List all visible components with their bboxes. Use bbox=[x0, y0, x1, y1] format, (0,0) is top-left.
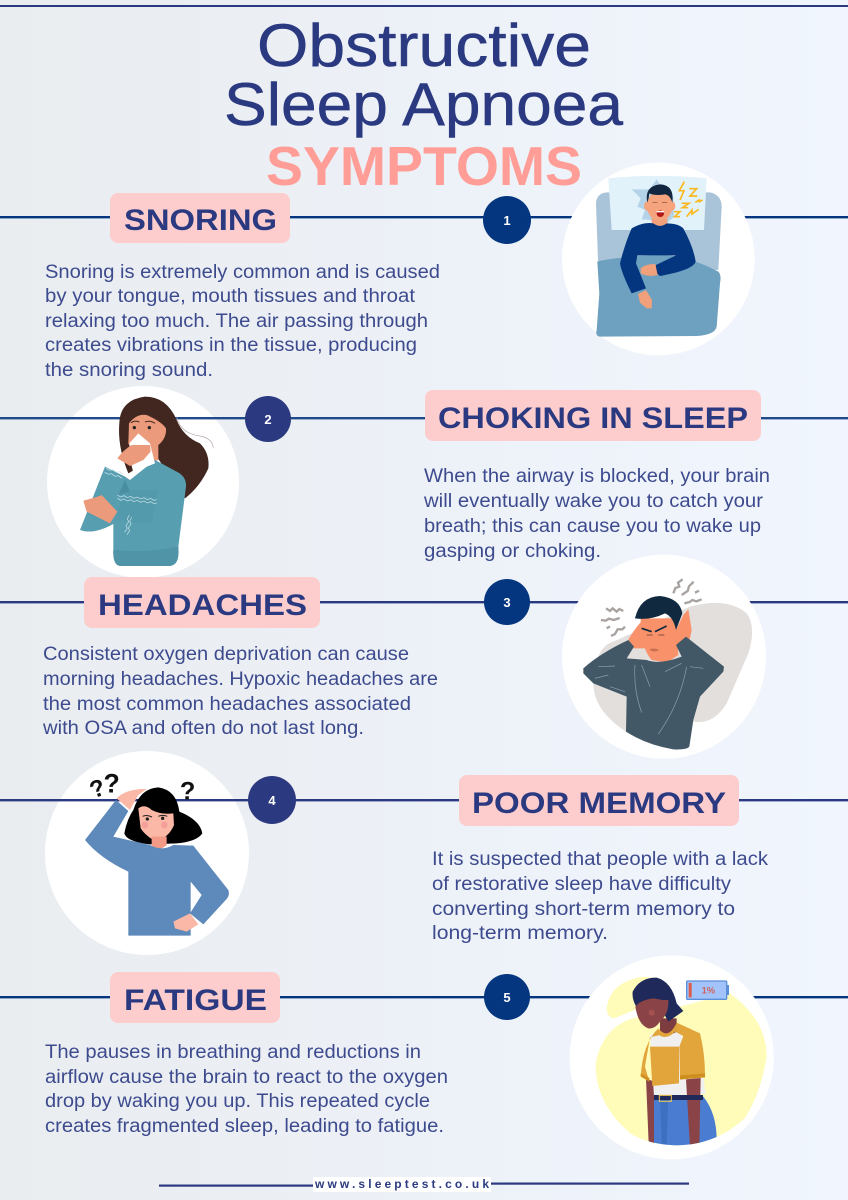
heading: choking in sleep: CHOKING IN SLEEP bbox=[438, 402, 748, 435]
title: SYMPTOMS bbox=[266, 135, 582, 197]
icon: man covering ears bbox=[562, 555, 766, 759]
heading: choking in sleep bbox=[425, 390, 761, 441]
number badge 3 bbox=[484, 579, 530, 625]
icon: confused woman scratching head: ? bbox=[180, 778, 195, 806]
icon: exhausted woman with low battery: 1% bbox=[702, 986, 716, 996]
text: snoring description: creates vibrations in the tissue, producing bbox=[45, 335, 417, 356]
title: Obstructive bbox=[257, 12, 591, 79]
text: snoring description: Snoring is extremely common and is caused bbox=[45, 262, 440, 283]
panel: choking in sleep bbox=[80, 390, 770, 566]
heading: poor memory: POOR MEMORY bbox=[472, 787, 726, 820]
text: snoring description bbox=[45, 262, 440, 381]
text: choking description: breath; this can cause you to wake up bbox=[424, 516, 761, 537]
icon: woman coughing into tissue bbox=[80, 397, 213, 566]
icon: man snoring in bed bbox=[562, 163, 755, 355]
footer website address: www.sleeptest.co.uk bbox=[314, 1177, 489, 1191]
text: headaches description: with OSA and often do not last long. bbox=[42, 718, 364, 739]
text: fatigue description: The pauses in breathing and reductions in bbox=[45, 1042, 421, 1063]
text: fatigue description: drop by waking you up. This repeated cycle bbox=[45, 1091, 430, 1112]
text: choking description bbox=[423, 466, 770, 562]
heading: snoring: SNORING bbox=[124, 204, 277, 237]
text: headaches description: Consistent oxygen deprivation can cause bbox=[43, 644, 409, 665]
number badge 5: 5 bbox=[503, 990, 511, 1005]
text: poor memory description: long-term memory. bbox=[432, 923, 608, 944]
text: fatigue description bbox=[45, 1042, 448, 1137]
text: poor memory description: It is suspected that people with a lack bbox=[432, 849, 769, 870]
heading: fatigue: FATIGUE bbox=[124, 984, 267, 1017]
panel: snoring bbox=[45, 163, 755, 381]
panel: poor memory bbox=[85, 769, 769, 944]
icon: confused woman scratching head bbox=[85, 769, 229, 936]
panel: headaches bbox=[42, 555, 766, 759]
heading: headaches bbox=[84, 577, 320, 628]
number badge 2 bbox=[245, 396, 291, 442]
heading: fatigue bbox=[110, 972, 280, 1023]
text: poor memory description: of restorative sleep have difficulty bbox=[432, 874, 732, 895]
text: fatigue description: airflow cause the brain to react to the oxygen bbox=[45, 1067, 448, 1088]
number badge 4 bbox=[248, 776, 296, 824]
number badge 1 bbox=[483, 196, 531, 244]
text: headaches description: the most common headaches associated bbox=[43, 694, 411, 715]
number badge 3: 3 bbox=[503, 595, 511, 610]
text: snoring description: by your tongue, mouth tissues and throat bbox=[45, 286, 416, 307]
number badge 2: 2 bbox=[264, 412, 272, 427]
text: snoring description: relaxing too much. The air passing through bbox=[45, 311, 428, 332]
text: choking description: gasping or choking. bbox=[424, 541, 601, 562]
number badge 1: 1 bbox=[503, 213, 511, 228]
text: poor memory description bbox=[432, 849, 769, 944]
icon: confused woman backdrop circle bbox=[45, 751, 249, 955]
text: headaches description: morning headaches. Hypoxic headaches are bbox=[43, 669, 438, 690]
icon: exhausted woman with low battery bbox=[570, 955, 774, 1159]
icon: confused woman scratching head: ? bbox=[86, 774, 109, 804]
icon: woman backdrop circle bbox=[47, 386, 239, 578]
text: snoring description: the snoring sound. bbox=[45, 360, 213, 381]
text: choking description: When the airway is blocked, your brain bbox=[424, 466, 770, 487]
number badge 5 bbox=[484, 974, 530, 1020]
panel: fatigue bbox=[45, 955, 774, 1159]
text: fatigue description: creates fragmented sleep, leading to fatigue. bbox=[45, 1116, 444, 1137]
heading: poor memory bbox=[459, 775, 739, 826]
heading: snoring bbox=[110, 193, 290, 243]
footer website address bbox=[159, 1177, 689, 1192]
title bbox=[224, 12, 624, 197]
icon: confused woman scratching head: ? bbox=[104, 769, 120, 799]
text: choking description: will eventually wake you to catch your bbox=[423, 491, 764, 512]
text: poor memory description: converting short-term memory to bbox=[432, 899, 735, 920]
text: headaches description bbox=[42, 644, 438, 739]
title: Sleep Apnoea bbox=[224, 71, 624, 138]
heading: headaches: HEADACHES bbox=[98, 589, 307, 622]
number badge 4: 4 bbox=[268, 793, 276, 808]
